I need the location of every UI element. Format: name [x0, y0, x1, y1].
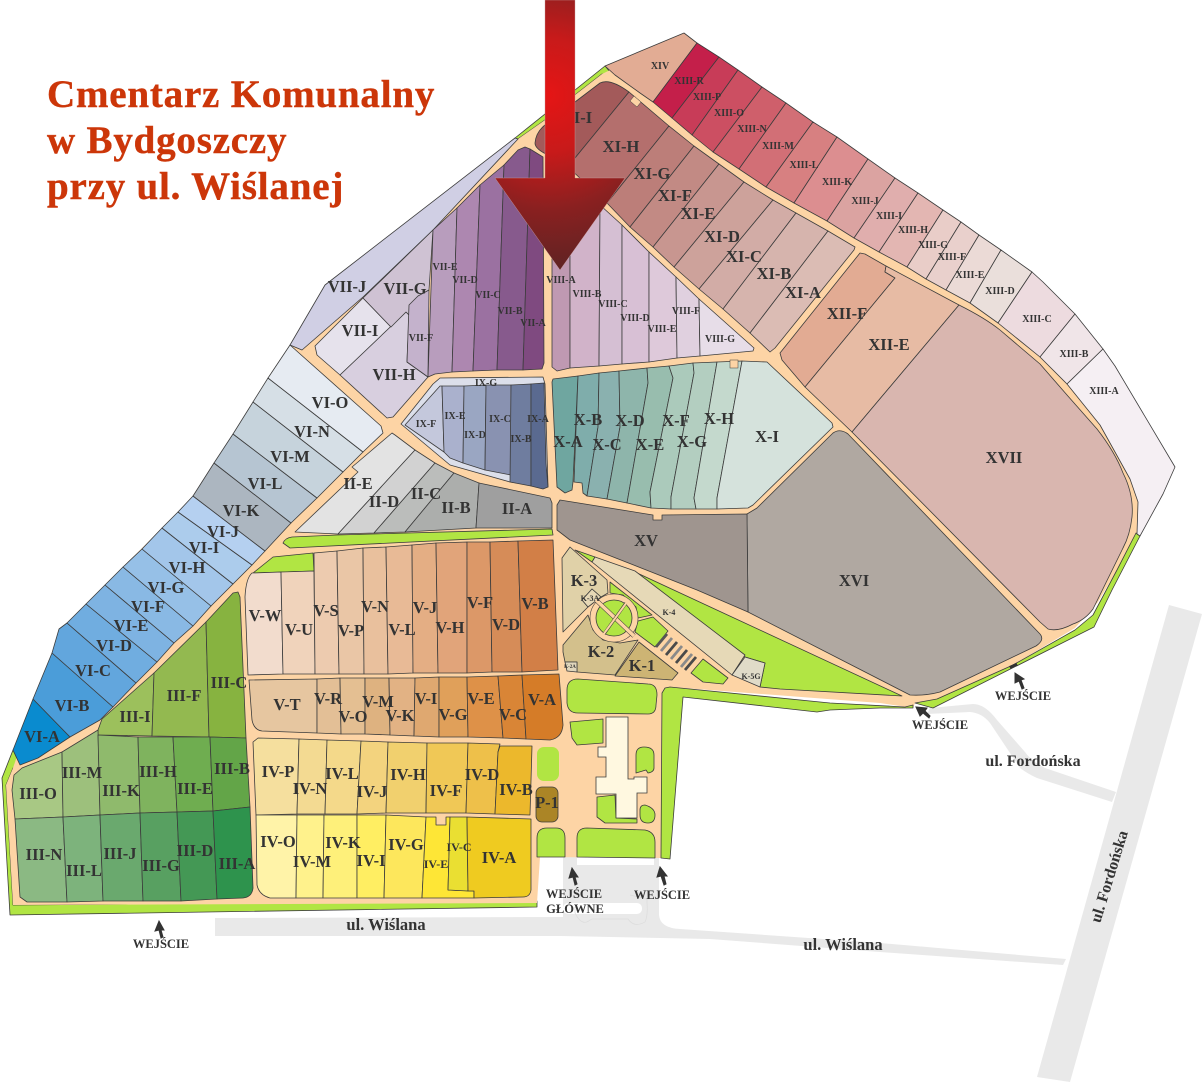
IX labels: IX-F: [416, 419, 436, 430]
IX labels: IX-A: [527, 414, 550, 425]
IV large labels: [260, 762, 533, 871]
IX plots: [401, 377, 548, 489]
IX labels: IX-E: [444, 411, 466, 422]
V labels: V-B: [521, 594, 549, 613]
III plots: [12, 592, 253, 902]
V labels: V-I: [415, 689, 437, 708]
X labels: X-F: [662, 411, 690, 430]
XI plots: [535, 82, 855, 352]
K small labels: K-4: [663, 608, 675, 617]
XIII labels: XIII-P: [693, 92, 721, 103]
V labels: V-P: [338, 621, 364, 640]
entrance labels: WEJŚCIE: [634, 888, 690, 902]
site base: green verge and peach alleys: [2, 34, 1175, 915]
XIII labels: XIII-R: [674, 76, 704, 87]
VII small labels: [409, 262, 547, 344]
III labels: III-B: [214, 759, 250, 778]
IV large labels: IV-M: [293, 852, 332, 871]
street labels: [346, 753, 1132, 954]
VII plots: [290, 138, 544, 418]
chapel building: [596, 717, 647, 818]
X labels: [553, 409, 779, 454]
IV large labels: IV-I: [356, 851, 386, 870]
IV small labels: [424, 840, 472, 871]
VII small labels: VII-F: [409, 333, 433, 344]
III labels: III-J: [103, 844, 137, 863]
III labels: III-D: [177, 841, 213, 860]
IV large labels: IV-H: [390, 765, 426, 784]
III labels: III-G: [142, 856, 180, 875]
panel: section IX: [401, 377, 550, 489]
III labels: [19, 673, 255, 880]
IV large labels: IV-L: [325, 764, 359, 783]
X labels: X-H: [704, 409, 734, 428]
X plots: [552, 361, 833, 509]
VIII labels: VIII-C: [598, 299, 628, 310]
entrance labels: GŁÓWNE: [546, 902, 604, 916]
III labels: III-E: [177, 779, 213, 798]
III labels: III-K: [102, 781, 140, 800]
XIII labels: XIII-I: [876, 211, 902, 222]
V labels: V-F: [467, 593, 493, 612]
VI labels: VI-I: [189, 538, 219, 557]
V labels: V-M: [362, 692, 394, 711]
VII small labels: VII-A: [520, 318, 547, 329]
K small labels: [564, 594, 761, 681]
V labels: V-K: [385, 706, 415, 725]
VIII labels: VIII-B: [573, 289, 602, 300]
XIII labels: XIII-K: [822, 177, 852, 188]
XIII labels: XIII-J: [851, 196, 879, 207]
K small labels: K-2A: [564, 665, 576, 670]
V labels: V-J: [413, 598, 437, 617]
street labels: ul. Fordońska: [985, 753, 1081, 770]
X labels: X-C: [592, 435, 622, 454]
arrow: location marker: [495, 0, 625, 270]
V labels: V-W: [249, 606, 282, 625]
VII large labels: VII-G: [383, 279, 427, 298]
IV small labels: IV-C: [446, 840, 472, 854]
V labels: V-T: [273, 695, 301, 714]
plot labels: XV: [634, 531, 658, 550]
II labels: II-B: [441, 498, 471, 517]
V labels: V-E: [467, 689, 495, 708]
VI labels: VI-E: [114, 616, 148, 635]
XIII labels: XIII-H: [898, 225, 928, 236]
XIII labels: [651, 61, 1120, 397]
IV large labels: IV-N: [293, 779, 327, 798]
K small labels: K-5G: [741, 672, 761, 681]
III labels: III-I: [119, 707, 151, 726]
VI labels: [24, 393, 348, 746]
panel: K sections and chapel grounds: [535, 547, 765, 822]
plot labels: XVI: [839, 571, 869, 590]
V labels: V-U: [285, 620, 313, 639]
panel: section II: [295, 433, 552, 534]
X labels: X-E: [636, 435, 664, 454]
panel: section X: [552, 361, 833, 509]
IV large labels: IV-P: [262, 762, 294, 781]
panel: section V: [245, 540, 563, 740]
III labels: III-N: [26, 845, 62, 864]
panel: section VIII: [546, 160, 754, 371]
XI labels: XI-F: [658, 186, 692, 205]
V plots: [245, 540, 563, 740]
title: [47, 73, 435, 208]
XI labels: XI-A: [785, 283, 821, 302]
VI labels: VI-L: [248, 474, 282, 493]
title: Cmentarz Komunalny: [47, 73, 435, 116]
XI labels: XI-B: [757, 264, 791, 283]
panel: section VII: [290, 138, 547, 418]
entrance labels: WEJŚCIE: [912, 718, 968, 732]
entrance labels: WEJŚCIE: [133, 937, 189, 951]
VI labels: VI-N: [294, 422, 330, 441]
IV large labels: IV-J: [357, 782, 387, 801]
III labels: III-C: [211, 673, 247, 692]
V labels: V-L: [388, 620, 416, 639]
VIII labels: VIII-E: [648, 324, 677, 335]
panel: green plots and central grounds: [253, 529, 902, 858]
IX labels: [416, 378, 550, 445]
V labels: V-A: [528, 690, 556, 709]
XI labels: XI-I: [562, 108, 592, 127]
II labels: II-C: [411, 484, 441, 503]
street labels: ul. Wiślana: [346, 915, 426, 934]
IV large labels: IV-B: [499, 780, 533, 799]
VII large labels: VII-H: [372, 365, 416, 384]
VII large labels: VII-I: [342, 321, 378, 340]
entrance labels: WEJŚCIE: [995, 689, 1051, 703]
VIII labels: VIII-A: [546, 275, 576, 286]
panel: sections XII, XVII, XVI, XV: [557, 253, 1132, 695]
panel: section XIII and XIV: [605, 33, 1175, 536]
III labels: III-M: [62, 763, 103, 782]
VI labels: VI-O: [312, 393, 348, 412]
IX labels: IX-C: [489, 414, 511, 425]
XIII labels: XIII-C: [1022, 314, 1052, 325]
street labels: ul. Wiślana: [803, 935, 883, 954]
VII small labels: VII-E: [432, 262, 458, 273]
X labels: X-I: [755, 427, 779, 446]
VI labels: VI-B: [55, 696, 89, 715]
IV large labels: IV-F: [430, 781, 462, 800]
V labels: V-R: [314, 689, 343, 708]
XIII labels: XIII-D: [985, 286, 1015, 297]
V labels: V-G: [438, 705, 468, 724]
plot labels: XII-E: [868, 335, 910, 354]
XIII labels: XIII-L: [790, 160, 819, 171]
XI labels: XI-D: [704, 227, 740, 246]
plot labels: XII-F: [827, 304, 867, 323]
XIII labels: XIII-O: [714, 108, 744, 119]
VI labels: VI-A: [24, 727, 60, 746]
XIII labels: XIII-N: [737, 124, 768, 135]
IV small labels: IV-E: [424, 857, 448, 871]
VI labels: VI-H: [169, 558, 205, 577]
XI labels: XI-E: [681, 204, 715, 223]
III labels: III-L: [66, 861, 102, 880]
VI labels: VI-C: [75, 661, 111, 680]
VI labels: VI-J: [207, 522, 239, 541]
V labels: V-O: [338, 707, 368, 726]
IV large labels: IV-G: [388, 835, 424, 854]
VII small labels: VII-D: [452, 275, 478, 286]
XI labels: XI-H: [603, 137, 639, 156]
IV large labels: IV-O: [260, 832, 296, 851]
VI labels: VI-M: [270, 447, 310, 466]
parking P-1: [536, 787, 558, 822]
V labels: V-N: [361, 597, 389, 616]
K labels: K-3: [571, 571, 597, 590]
IV large labels: IV-D: [465, 765, 499, 784]
III labels: III-H: [139, 762, 177, 781]
XIII labels: XIII-F: [938, 252, 966, 263]
street: ul. Fordońska and ul. Wiślana (grey roads): [215, 605, 1202, 1082]
panel: section VI: [13, 345, 383, 765]
XI labels: [562, 108, 821, 302]
VII small labels: VII-B: [497, 306, 523, 317]
IX labels: IX-D: [464, 430, 486, 441]
large plots: [557, 253, 1132, 695]
III labels: III-F: [167, 686, 201, 705]
VI labels: VI-G: [148, 578, 184, 597]
XIII labels: XIII-G: [918, 240, 948, 251]
K labels: P-1: [535, 793, 559, 812]
title: w Bydgoszczy: [47, 119, 287, 162]
panel: section III: [12, 592, 255, 902]
VIII labels: VIII-G: [705, 334, 735, 345]
VIII labels: VIII-F: [672, 306, 700, 317]
XI labels: XI-G: [634, 164, 670, 183]
street labels: ul. Fordońska: [1088, 829, 1132, 925]
IX labels: IX-G: [475, 378, 497, 389]
K labels: K-1: [629, 656, 655, 675]
VI labels: VI-D: [96, 636, 132, 655]
K plots: [562, 547, 765, 687]
X labels: X-B: [574, 410, 602, 429]
VIII plots: [552, 160, 754, 371]
circular garden: [590, 594, 638, 642]
VI labels: VI-F: [131, 597, 165, 616]
columbarium stripes: [656, 634, 696, 670]
entrance labels: [133, 689, 1051, 951]
alley nubs: [630, 96, 738, 368]
III labels: III-O: [19, 784, 57, 803]
IV large labels: IV-A: [482, 848, 516, 867]
XI labels: XI-C: [726, 247, 762, 266]
XIII plots: [605, 33, 1175, 536]
II labels: II-E: [343, 474, 373, 493]
V labels: V-D: [492, 615, 520, 634]
XIII labels: XIII-B: [1060, 349, 1089, 360]
K labels: K-2: [588, 642, 614, 661]
entrance arrows: [155, 663, 1024, 938]
V labels: [249, 593, 556, 726]
X labels: X-G: [677, 432, 707, 451]
XIII labels: XIII-M: [762, 141, 794, 152]
title: przy ul. Wiślanej: [47, 165, 344, 208]
V labels: V-S: [313, 601, 339, 620]
VII large labels: VII-J: [328, 277, 366, 296]
X labels: X-A: [553, 432, 583, 451]
XIII labels: XIII-E: [956, 270, 985, 281]
XIII labels: XIV: [651, 61, 670, 72]
K labels: [535, 571, 655, 812]
VII small labels: VII-C: [475, 290, 501, 301]
VII large labels: [328, 277, 427, 384]
VI labels: VI-K: [223, 501, 259, 520]
II labels: II-A: [502, 499, 532, 518]
II labels: II-D: [369, 492, 399, 511]
IV large labels: IV-K: [325, 833, 361, 852]
X labels: X-D: [615, 411, 645, 430]
II labels: [343, 474, 532, 518]
VIII labels: VIII-D: [620, 313, 650, 324]
V labels: V-H: [435, 618, 465, 637]
VI plots: [13, 345, 383, 765]
II plots: [295, 433, 552, 534]
III labels: III-A: [219, 854, 255, 873]
entrance labels: WEJŚCIE: [546, 887, 602, 901]
panel: section IV: [253, 738, 533, 898]
XIII labels: XIII-A: [1089, 386, 1120, 397]
panel: section XI: [535, 82, 855, 352]
IX labels: IX-B: [510, 434, 532, 445]
VIII labels: [546, 275, 735, 345]
IV plots: [253, 738, 532, 898]
V labels: V-C: [499, 705, 527, 724]
K small labels: K-3A: [581, 594, 600, 603]
plot labels: [634, 304, 1022, 590]
plot labels: XVII: [986, 448, 1022, 467]
